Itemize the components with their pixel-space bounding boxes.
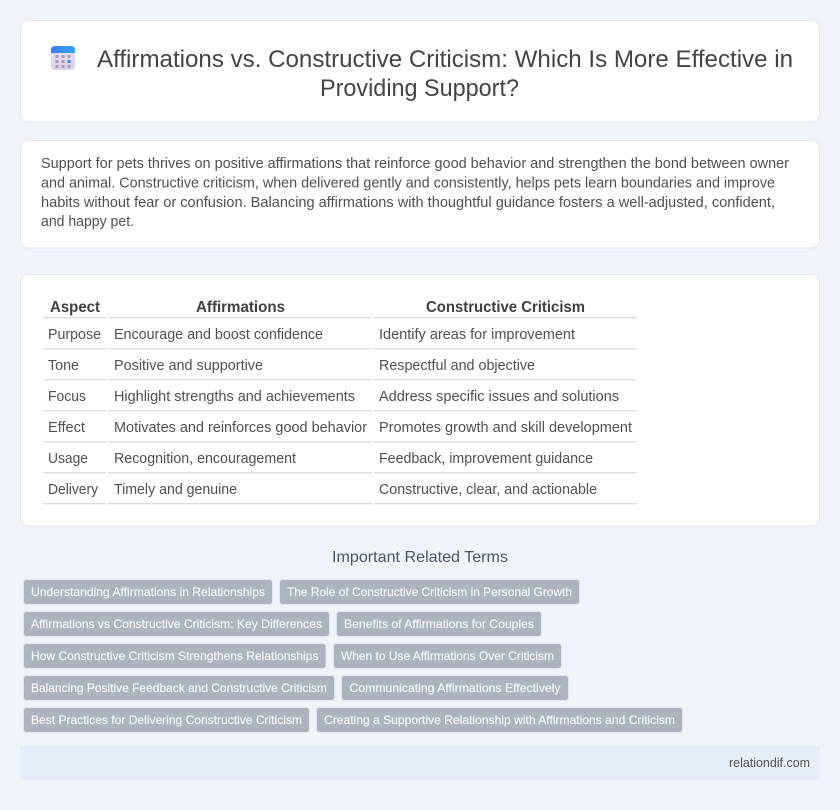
- tag: Affirmations vs Constructive Criticism: Key Differences: [31, 617, 322, 631]
- row: effect: Effect: [48, 420, 85, 436]
- tag: [280, 580, 580, 604]
- text block: introduction paragraph: habits without fear or confusion. Balancing affirmations with thoughtful guidance fosters a well-adjusted, confident,: [41, 195, 775, 211]
- row: focus: Highlight strengths and achievements: [114, 389, 355, 405]
- row: usage: Recognition, encouragement: [114, 451, 296, 467]
- tag: Balancing Positive Feedback and Constructive Criticism: [31, 681, 327, 695]
- table header: [50, 299, 585, 316]
- row: tone: Positive and supportive: [114, 358, 263, 374]
- heading: important related terms: Important Related Terms: [332, 549, 508, 566]
- text block: introduction paragraph: and happy pet.: [41, 214, 134, 230]
- tag: Understanding Affirmations in Relationships: [31, 585, 265, 599]
- row: usage: Feedback, improvement guidance: [379, 451, 593, 467]
- row: delivery: Timely and genuine: [114, 482, 237, 498]
- row: purpose: Identify areas for improvement: [379, 327, 575, 343]
- row: purpose: Encourage and boost confidence: [114, 327, 323, 343]
- tag: [24, 612, 330, 636]
- panel: title card: [20, 20, 820, 122]
- table header: Affirmations: [196, 299, 285, 316]
- footer: [20, 746, 820, 780]
- tag: [336, 612, 542, 636]
- text block: introduction paragraph: Support for pets thrives on positive affirmations that reinforce good behavior and strengthen the bond between owner: [41, 156, 789, 172]
- related terms tags: [24, 580, 682, 732]
- tag: Communicating Affirmations Effectively: [350, 681, 560, 695]
- tag: [24, 708, 310, 732]
- tag: [342, 676, 568, 700]
- row: focus: Focus: [48, 389, 86, 405]
- row: tone: Respectful and objective: [379, 358, 535, 374]
- panel: introduction: [20, 140, 820, 248]
- title: [97, 46, 793, 102]
- row: delivery: [48, 482, 597, 498]
- footer source text: relationdif.com: [729, 755, 810, 770]
- tag: [24, 676, 334, 700]
- tag: [334, 644, 562, 668]
- row: tone: [48, 358, 535, 374]
- tag: Best Practices for Delivering Constructive Criticism: [31, 713, 302, 727]
- panel: comparison table: [20, 274, 820, 526]
- tag: When to Use Affirmations Over Criticism: [341, 649, 554, 663]
- tag: [316, 708, 682, 732]
- row: focus: [48, 389, 619, 405]
- title: Affirmations vs. Constructive Criticism: Which Is More Effective in: [97, 46, 793, 73]
- tag: [24, 644, 326, 668]
- tag: The Role of Constructive Criticism in Personal Growth: [287, 585, 572, 599]
- table header: Constructive Criticism: [426, 299, 585, 316]
- row: usage: [48, 451, 593, 467]
- row: usage: Usage: [48, 451, 88, 467]
- tag: Benefits of Affirmations for Couples: [344, 617, 534, 631]
- title: Providing Support?: [320, 75, 519, 102]
- row: focus: Address specific issues and solutions: [379, 389, 619, 405]
- row: purpose: [48, 327, 575, 343]
- tag: [24, 580, 272, 604]
- text block: introduction paragraph: and animal. Constructive criticism, when delivered gently and consistently, helps pets learn boundaries and improve: [41, 176, 775, 192]
- icon: calendar: [51, 46, 75, 70]
- row: effect: Motivates and reinforces good behavior: [114, 420, 367, 436]
- row: delivery: Constructive, clear, and actionable: [379, 482, 597, 498]
- row: effect: [48, 420, 632, 436]
- table header: Aspect: [50, 299, 101, 316]
- tag: How Constructive Criticism Strengthens Relationships: [31, 649, 318, 663]
- row: tone: Tone: [48, 358, 79, 374]
- tag: Creating a Supportive Relationship with Affirmations and Criticism: [324, 713, 675, 727]
- row: purpose: Purpose: [48, 327, 101, 343]
- row: delivery: Delivery: [48, 482, 99, 498]
- row: effect: Promotes growth and skill development: [379, 420, 632, 436]
- text block: introduction paragraph: [41, 156, 789, 230]
